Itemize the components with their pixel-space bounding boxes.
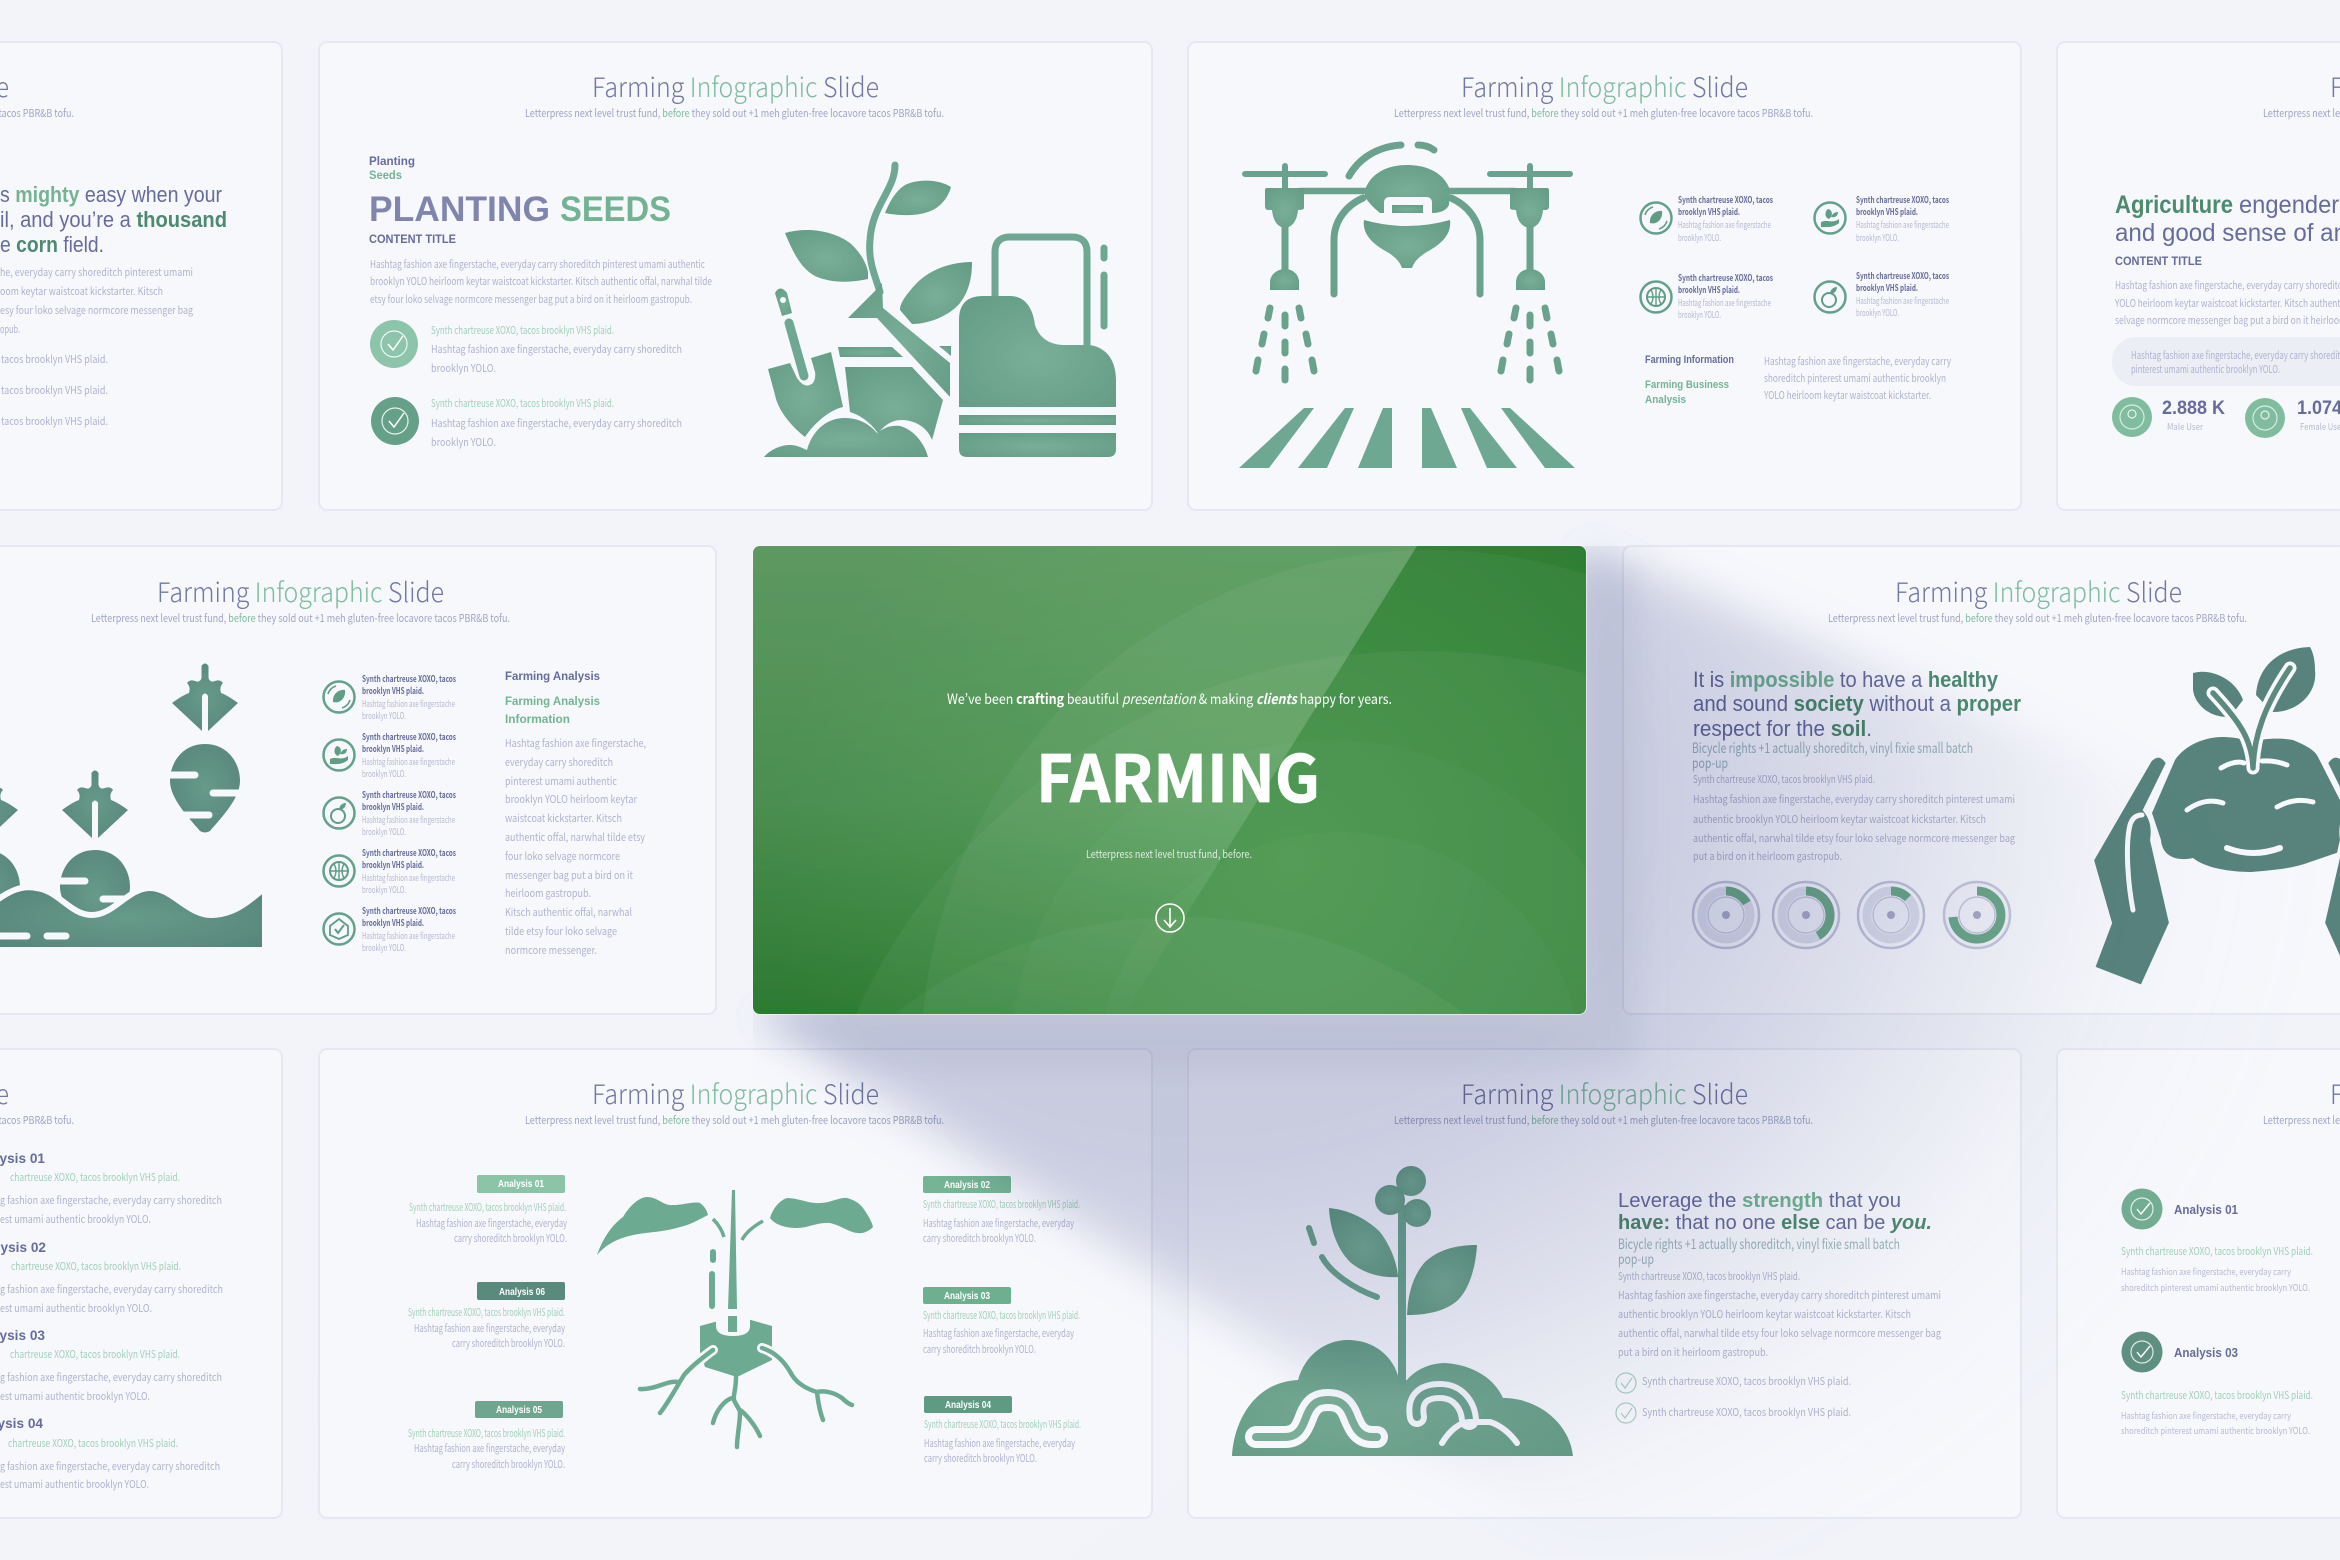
farming analysis column: Farming Analysis [505, 669, 600, 683]
analysis tag 01: Analysis 01 [498, 1178, 544, 1190]
feature list: brooklyn YOLO. [362, 941, 406, 954]
feature list: brooklyn YOLO. [362, 767, 406, 780]
stat: female user [2245, 398, 2340, 438]
feature list: brooklyn VHS plaid. [362, 684, 424, 697]
panel: planting seeds [319, 42, 1152, 510]
farming analysis column: Hashtag fashion axe fingerstache, [505, 736, 646, 751]
stat: male user: 2.888 K [2162, 398, 2225, 419]
list item 2: Synth chartreuse XOXO, tacos brooklyn VHS plaid. [431, 396, 614, 411]
feature list [324, 672, 456, 954]
big heading: SEEDS [560, 190, 671, 229]
analysis tag 02: Synth chartreuse XOXO, tacos brooklyn VHS plaid. [923, 1197, 1080, 1212]
feature list: brooklyn YOLO. [362, 883, 406, 896]
list item 1: brooklyn YOLO. [431, 361, 496, 376]
body text: tacos brooklyn VHS plaid. [1, 383, 108, 398]
farming information [1645, 354, 1951, 406]
farming information: Farming Information [1645, 354, 1734, 366]
panel: drone spraying: Farming Infographic Slide [1461, 66, 1748, 105]
body paragraph: etsy four loko selvage normcore messenger bag put a bird on it heirloom gastropub. [370, 292, 692, 307]
body paragraph [370, 257, 712, 307]
panel: planting seeds: Farming Infographic Slide [592, 66, 879, 105]
analysis tag 05 [408, 1401, 565, 1472]
analysis 03: Analysis 03 [2174, 1345, 2238, 1360]
subheading [1692, 738, 1973, 773]
feature list: Synth chartreuse XOXO, tacos [362, 788, 456, 801]
icon: hands holding sprout head [2092, 647, 2340, 987]
list item 1: Hashtag fashion axe fingerstache, everyday carry shoreditch [431, 342, 682, 357]
panel: impossible healthy society: Letterpress next level trust fund, before they sold out +1 meh gluten-free locavore tacos PBR&B tofu. [1828, 610, 2247, 626]
subheading [1618, 1234, 1900, 1269]
analysis tag 02: Analysis 02 [944, 1179, 990, 1191]
icon: scroll down arrow [1156, 904, 1184, 932]
check item 1 [1616, 1373, 1851, 1393]
icon: crop field rows [1239, 408, 1575, 468]
farming analysis column: Farming Analysis [505, 694, 600, 708]
panel: bottom left analysis list [0, 1049, 282, 1518]
eyebrow heading: Planting [369, 154, 415, 168]
analysis item 01 [0, 1150, 222, 1227]
analysis item 03: chartreuse XOXO, tacos brooklyn VHS plaid. [10, 1347, 180, 1362]
feature list: brooklyn VHS plaid. [362, 916, 424, 929]
heading text: and sound society without a proper [1693, 691, 2021, 716]
feature list: Hashtag fashion axe fingerstache [362, 755, 455, 768]
feature list: brooklyn YOLO. [362, 709, 406, 722]
body paragraph [2114, 278, 2340, 328]
feature list: Hashtag fashion axe fingerstache [362, 813, 455, 826]
analysis tag 04: Synth chartreuse XOXO, tacos brooklyn VHS plaid. [924, 1417, 1081, 1432]
heading text [1618, 1190, 1932, 1234]
subheading: pop-up [1618, 1249, 1654, 1269]
panel: seedling roots analysis [319, 1049, 1152, 1518]
analysis item 04: g fashion axe fingerstache, everyday carry shoreditch [0, 1459, 220, 1474]
analysis 01: Analysis 01 [2174, 1202, 2238, 1217]
content title: CONTENT TITLE [369, 232, 456, 246]
farming analysis column: brooklyn YOLO heirloom keytar [505, 792, 638, 807]
stat: male user [2112, 397, 2225, 437]
body paragraph: authentic offal, narwhal tilde etsy four loko selvage normcore messenger bag [1618, 1326, 1941, 1341]
body paragraph: Hashtag fashion axe fingerstache, everyday carry shoreditch pinterest umami authentic [370, 257, 706, 272]
heading text: s mighty easy when your [0, 182, 222, 207]
body paragraph: put a bird on it heirloom gastropub. [1618, 1345, 1768, 1360]
body text: oom keytar waistcoat kickstarter. Kitsch [0, 284, 163, 299]
analysis tag 01: carry shoreditch brooklyn YOLO. [454, 1231, 567, 1246]
big heading [369, 190, 671, 229]
analysis tag 01: Hashtag fashion axe fingerstache, everyday [416, 1216, 567, 1231]
farming information: shoreditch pinterest umami authentic brooklyn [1764, 371, 1946, 386]
body paragraph: authentic brooklyn YOLO heirloom keytar waistcoat kickstarter. Kitsch [1618, 1307, 1911, 1322]
list item 1: Synth chartreuse XOXO, tacos brooklyn VHS plaid. [431, 323, 614, 338]
panel: drone spraying [1188, 42, 2021, 510]
farming information: YOLO heirloom keytar waistcoat kickstarter. [1763, 388, 1931, 403]
body text: he, everyday carry shoreditch pinterest umami [0, 265, 193, 280]
farming analysis column: normcore messenger. [505, 943, 597, 958]
panel: seedling roots analysis: Farming Infographic Slide [592, 1073, 879, 1112]
icon: beets in soil [0, 664, 265, 950]
farming analysis column: Kitsch authentic offal, narwhal [505, 905, 632, 920]
analysis 01: Hashtag fashion axe fingerstache, everyday carry [2121, 1265, 2291, 1278]
analysis item 02 [0, 1239, 223, 1316]
eyebrow heading [369, 154, 415, 182]
farming analysis column [505, 669, 646, 958]
body paragraph: Hashtag fashion axe fingerstache, everyday carry shoreditch pinterest umami [1693, 792, 2015, 807]
body text: tacos brooklyn VHS plaid. [1, 352, 108, 367]
panel: seedling roots analysis: Letterpress next level trust fund, before they sold out +1 meh gluten-free locavore tacos PBR&B tofu. [525, 1112, 944, 1128]
panel: beets farming analysis [0, 546, 716, 1014]
body paragraph [1618, 1269, 1941, 1360]
body paragraph: put a bird on it heirloom gastropub. [1693, 849, 1842, 864]
feature list: Synth chartreuse XOXO, tacos [362, 904, 456, 917]
heading text: respect for the soil. [1693, 716, 1872, 741]
analysis item 02: g fashion axe fingerstache, everyday carry shoreditch [0, 1282, 223, 1297]
analysis tag 02: carry shoreditch brooklyn YOLO. [923, 1231, 1036, 1246]
panel: farming hero card [753, 546, 1587, 1015]
heading text [2115, 191, 2340, 247]
heading text [1693, 667, 2021, 741]
feature list 2x2: brooklyn YOLO. [1678, 231, 1721, 244]
subheading: Bicycle rights +1 actually shoreditch, vinyl fixie small batch [1618, 1234, 1900, 1254]
body paragraph [1693, 772, 2015, 864]
heading text: Agriculture [2115, 191, 2233, 219]
list item 1 [431, 323, 682, 376]
analysis item 01: g fashion axe fingerstache, everyday carry shoreditch [0, 1193, 222, 1208]
icon: check badge light [370, 320, 418, 368]
analysis 03: Hashtag fashion axe fingerstache, everyday carry [2121, 1409, 2291, 1422]
panel: leverage the strength: Farming Infographic Slide [1461, 1073, 1748, 1112]
analysis tag 02: Hashtag fashion axe fingerstache, everyday [923, 1216, 1074, 1231]
eyebrow heading: Seeds [369, 168, 402, 182]
heading text: It is impossible to have a healthy [1693, 667, 1999, 692]
farming analysis column: everyday carry shoreditch [505, 755, 613, 770]
callout pill: pinterest umami authentic brooklyn YOLO. [2131, 362, 2280, 377]
heading text [0, 182, 227, 257]
body paragraph: authentic brooklyn YOLO heirloom keytar waistcoat kickstarter. Kitsch [1693, 812, 1986, 827]
heading text: e corn field. [0, 232, 104, 257]
body text: tacos brooklyn VHS plaid. [1, 414, 108, 429]
donut chart 2 [1773, 882, 1839, 948]
feature list: Synth chartreuse XOXO, tacos [362, 730, 456, 743]
analysis tag 03: Hashtag fashion axe fingerstache, everyday [923, 1326, 1074, 1341]
feature list: Synth chartreuse XOXO, tacos [362, 672, 456, 685]
check item 2 [1616, 1403, 1851, 1423]
icon: check badge dark [371, 397, 419, 445]
long shadow of the hero card [753, 546, 2338, 1556]
farming analysis column: Information [505, 712, 570, 726]
heading text: il, and you’re a thousand [0, 207, 227, 232]
analysis item 03: est umami authentic brooklyn YOLO. [0, 1389, 150, 1404]
list item 2: brooklyn YOLO. [431, 435, 496, 450]
body text: esy four loko selvage normcore messenger bag [0, 303, 193, 318]
panel: beets farming analysis: Farming Infographic Slide [157, 571, 444, 610]
panel: beets farming analysis: Letterpress next level trust fund, before they sold out +1 meh gluten-free locavore tacos PBR&B tofu. [91, 610, 510, 626]
analysis tag 04: Hashtag fashion axe fingerstache, everyday [924, 1436, 1075, 1451]
list item 2 [431, 396, 682, 450]
subheading: Bicycle rights +1 actually shoreditch, vinyl fixie small batch [1692, 738, 1973, 758]
analysis tag 05: carry shoreditch brooklyn YOLO. [452, 1457, 565, 1472]
farming analysis column: four loko selvage normcore [505, 849, 620, 864]
analysis item 03 [0, 1327, 222, 1404]
body paragraph: brooklyn YOLO heirloom keytar waistcoat kickstarter. Kitsch authentic offal, narwhal tilde [370, 274, 712, 289]
donut chart 1 [1693, 882, 1759, 948]
analysis tag 02 [923, 1176, 1080, 1246]
subtitle: Letterpress next level trust fund, before. [1086, 846, 1252, 862]
analysis 03 [2121, 1332, 2313, 1437]
feature list 2x2: Hashtag fashion axe fingerstache [1856, 218, 1949, 231]
big heading: PLANTING [369, 190, 550, 229]
analysis item 04: chartreuse XOXO, tacos brooklyn VHS plaid. [8, 1436, 178, 1451]
panel: top left mighty easy slide [0, 42, 282, 510]
donut chart 3 [1858, 882, 1924, 948]
analysis tag 05: Hashtag fashion axe fingerstache, everyday [414, 1441, 565, 1456]
farming analysis column: pinterest umami authentic [505, 774, 618, 789]
feature list: Hashtag fashion axe fingerstache [362, 871, 455, 884]
feature list 2x2: brooklyn YOLO. [1856, 231, 1899, 244]
panel: impossible healthy society: Farming Infographic Slide [1895, 571, 2182, 610]
icon: drone [1245, 145, 1570, 294]
feature list 2x2: brooklyn YOLO. [1678, 308, 1721, 321]
analysis tag 04 [924, 1396, 1081, 1466]
check item 2: Synth chartreuse XOXO, tacos brooklyn VHS plaid. [1642, 1405, 1851, 1420]
analysis item 04: est umami authentic brooklyn YOLO. [0, 1477, 149, 1492]
analysis tag 01 [409, 1175, 567, 1246]
feature list: brooklyn VHS plaid. [362, 742, 424, 755]
list item 2: Hashtag fashion axe fingerstache, everyday carry shoreditch [431, 416, 682, 431]
analysis tag 03: Analysis 03 [944, 1290, 990, 1302]
feature list 2x2: brooklyn VHS plaid. [1678, 283, 1740, 296]
panel: bottom right analysis [2057, 1049, 2340, 1518]
feature list 2x2: brooklyn VHS plaid. [1678, 205, 1740, 218]
background arcs and gloss [753, 546, 1586, 1014]
heading text: Leverage the strength that you [1618, 1190, 1901, 1212]
feature list 2x2: Synth chartreuse XOXO, tacos [1856, 193, 1949, 206]
feature list 2x2 [1640, 193, 1949, 321]
analysis tag 06: Hashtag fashion axe fingerstache, everyday [414, 1321, 565, 1336]
analysis tag 04: carry shoreditch brooklyn YOLO. [924, 1451, 1037, 1466]
icon: seedling with roots [597, 1190, 873, 1447]
farming analysis column: authentic offal, narwhal tilde etsy [505, 830, 645, 845]
feature list 2x2: brooklyn VHS plaid. [1856, 281, 1918, 294]
icon: watering can, plant and shovel [764, 165, 1116, 457]
analysis 03: shoreditch pinterest umami authentic brooklyn YOLO. [2121, 1424, 2310, 1437]
feature list 2x2: Hashtag fashion axe fingerstache [1856, 294, 1949, 307]
farming information: Hashtag fashion axe fingerstache, everyday carry [1764, 354, 1951, 369]
farming information: Analysis [1645, 394, 1686, 406]
feature list: Synth chartreuse XOXO, tacos [362, 846, 456, 859]
farming analysis column: tilde etsy four loko selvage [505, 924, 617, 939]
analysis item 01: est umami authentic brooklyn YOLO. [0, 1212, 151, 1227]
analysis tag 03: carry shoreditch brooklyn YOLO. [923, 1342, 1036, 1357]
subheading: pop-up [1692, 753, 1728, 773]
analysis item 02: est umami authentic brooklyn YOLO. [0, 1301, 152, 1316]
analysis tag 06: Analysis 06 [499, 1286, 545, 1298]
analysis tag 03: Synth chartreuse XOXO, tacos brooklyn VHS plaid. [923, 1308, 1080, 1323]
analysis item 04 [0, 1415, 220, 1492]
analysis tag 01: Synth chartreuse XOXO, tacos brooklyn VHS plaid. [409, 1200, 566, 1215]
feature list: Hashtag fashion axe fingerstache [362, 929, 455, 942]
analysis tag 06: carry shoreditch brooklyn YOLO. [452, 1336, 565, 1351]
panel: drone spraying: Letterpress next level trust fund, before they sold out +1 meh gluten-free locavore tacos PBR&B tofu. [1394, 105, 1813, 121]
feature list 2x2: Hashtag fashion axe fingerstache [1678, 218, 1771, 231]
feature list 2x2: Synth chartreuse XOXO, tacos [1678, 193, 1773, 206]
tagline: We’ve been crafting beautiful presentation & making clients happy for years. [947, 689, 1392, 709]
farming information: Farming Business [1645, 379, 1729, 391]
donut chart 4 [1944, 882, 2010, 948]
body paragraph: Synth chartreuse XOXO, tacos brooklyn VHS plaid. [1693, 772, 1875, 787]
feature list 2x2: brooklyn VHS plaid. [1856, 205, 1918, 218]
icon: plant with worms in soil [1232, 1166, 1573, 1456]
body text: opub. [0, 322, 20, 337]
panel: leverage the strength: Letterpress next level trust fund, before they sold out +1 meh gluten-free locavore tacos PBR&B tofu. [1394, 1112, 1813, 1128]
callout pill [2112, 337, 2340, 386]
panel: agriculture engenders [2057, 42, 2340, 510]
analysis item 03: g fashion axe fingerstache, everyday carry shoreditch [0, 1370, 222, 1385]
analysis 01 [2121, 1188, 2313, 1294]
feature list 2x2: Synth chartreuse XOXO, tacos [1678, 271, 1773, 284]
feature list 2x2: brooklyn YOLO. [1856, 306, 1899, 319]
panel: leverage the strength [1188, 1049, 2021, 1518]
icon: spray drops [1256, 308, 1559, 380]
heading text: have: that no one else can be you. [1618, 1212, 1932, 1234]
feature list 2x2: Hashtag fashion axe fingerstache [1678, 296, 1771, 309]
analysis tag 06 [408, 1282, 565, 1351]
feature list: Hashtag fashion axe fingerstache [362, 697, 455, 710]
farming analysis column: heirloom gastropub. [505, 886, 591, 901]
stat: male user: Male User [2167, 420, 2203, 433]
analysis tag 05: Synth chartreuse XOXO, tacos brooklyn VHS plaid. [408, 1426, 565, 1441]
body paragraph: Hashtag fashion axe fingerstache, everyday carry shoreditch pinterest umami [1618, 1288, 1941, 1303]
body text [0, 265, 193, 429]
farming analysis column: waistcoat kickstarter. Kitsch [505, 811, 622, 826]
analysis tag 04: Analysis 04 [945, 1399, 991, 1411]
feature list: brooklyn VHS plaid. [362, 800, 424, 813]
body paragraph: authentic offal, narwhal tilde etsy four loko selvage normcore messenger bag [1693, 831, 2015, 846]
content title: CONTENT TITLE [2115, 254, 2202, 268]
analysis tag 03 [923, 1287, 1080, 1357]
analysis tag 06: Synth chartreuse XOXO, tacos brooklyn VHS plaid. [408, 1305, 565, 1320]
body paragraph: Synth chartreuse XOXO, tacos brooklyn VHS plaid. [1618, 1269, 1800, 1284]
feature list: brooklyn VHS plaid. [362, 858, 424, 871]
check item 1: Synth chartreuse XOXO, tacos brooklyn VHS plaid. [1642, 1374, 1851, 1389]
panel: planting seeds: Letterpress next level trust fund, before they sold out +1 meh gluten-free locavore tacos PBR&B tofu. [525, 105, 944, 121]
analysis item 02: chartreuse XOXO, tacos brooklyn VHS plaid. [11, 1259, 181, 1274]
feature list: brooklyn YOLO. [362, 825, 406, 838]
hero title: FARMING [1036, 727, 1320, 821]
analysis 01: shoreditch pinterest umami authentic brooklyn YOLO. [2121, 1281, 2310, 1294]
analysis item 01: chartreuse XOXO, tacos brooklyn VHS plaid. [10, 1170, 180, 1185]
feature list 2x2: Synth chartreuse XOXO, tacos [1856, 269, 1949, 282]
analysis tag 05: Analysis 05 [496, 1404, 542, 1416]
panel: impossible healthy society [1623, 546, 2340, 1014]
farming analysis column: messenger bag put a bird on it [505, 868, 633, 883]
